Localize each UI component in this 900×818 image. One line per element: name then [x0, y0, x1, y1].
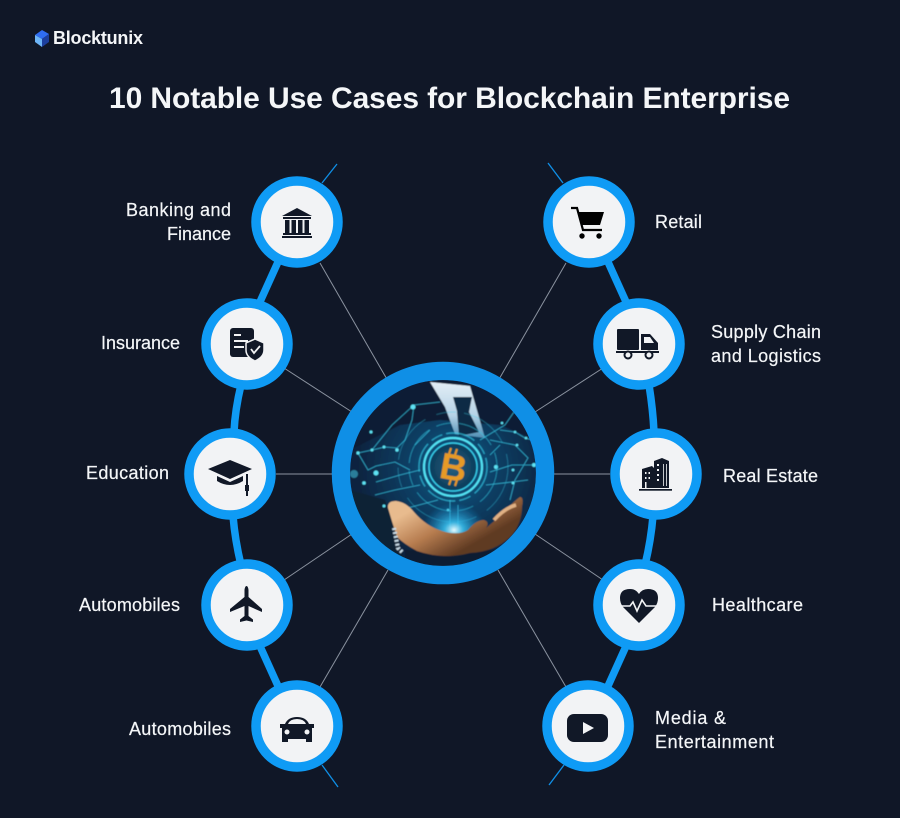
blue end tails [322, 163, 564, 787]
tie [453, 397, 479, 436]
icon: logo cube [35, 30, 49, 47]
icon: graduation cap [208, 460, 252, 496]
network nodes [356, 404, 536, 511]
label: Banking and Finance: Finance [167, 224, 231, 244]
label: Media and Entertainment: Entertainment [655, 732, 774, 752]
label: Automobiles lower: Automobiles [129, 719, 231, 739]
label: Real Estate: Real Estate [723, 466, 818, 486]
network lines [358, 402, 533, 530]
spokes connecting hub to nodes [276, 263, 610, 687]
node: Education [189, 433, 271, 515]
icon: document shield [230, 328, 264, 361]
hub ring [341, 371, 545, 575]
node: Supply Chain and Logistics [598, 303, 680, 385]
icon: cart [571, 208, 604, 239]
label: Retail: Retail [655, 212, 702, 232]
label: Supply Chain and Logistics: and Logistics [711, 346, 821, 366]
label: Insurance: Insurance [101, 333, 180, 353]
node: Insurance [206, 303, 288, 385]
label: Media and Entertainment: Media & [655, 708, 726, 728]
icon: truck [616, 329, 659, 358]
label: Automobiles upper: Automobiles [79, 595, 180, 615]
shirt [430, 382, 485, 438]
icon: car [280, 717, 314, 742]
suit [350, 380, 536, 450]
blue connector arc: left [233, 262, 278, 686]
node: Banking and Finance [256, 181, 338, 263]
node: Automobiles (car) [256, 685, 338, 767]
scene background [350, 420, 536, 558]
icon: play button [567, 714, 608, 742]
node: Real Estate [615, 433, 697, 515]
circular HUD rings [398, 412, 508, 522]
blue connector arc: right [608, 262, 654, 686]
icon: bank [282, 208, 312, 238]
hand [388, 497, 523, 556]
icon: buildings [639, 458, 672, 491]
node: Automobiles (plane) [206, 564, 288, 646]
label: Education: Education [86, 463, 169, 483]
node: Retail [548, 181, 630, 263]
label: Banking and Finance: Banking and [126, 200, 231, 220]
label: Healthcare: Healthcare [712, 595, 803, 615]
glow above palm [426, 505, 482, 534]
label: Supply Chain and Logistics [711, 322, 821, 366]
node: Media and Entertainment [547, 685, 629, 767]
logo [35, 28, 143, 48]
central hub image [341, 371, 545, 575]
label: Supply Chain and Logistics: Supply Chain [711, 322, 821, 342]
cuff sparkle [394, 528, 402, 552]
bitcoin symbol: B [437, 445, 470, 490]
icon: airplane [230, 586, 262, 622]
label: Media and Entertainment [655, 708, 774, 752]
title: 10 Notable Use Cases for Blockchain Enterprise [109, 82, 790, 115]
label: Banking and Finance [126, 200, 231, 244]
logo wordmark: Blocktunix [53, 28, 143, 48]
node: Healthcare [598, 564, 680, 646]
icon: heart pulse [620, 589, 658, 623]
